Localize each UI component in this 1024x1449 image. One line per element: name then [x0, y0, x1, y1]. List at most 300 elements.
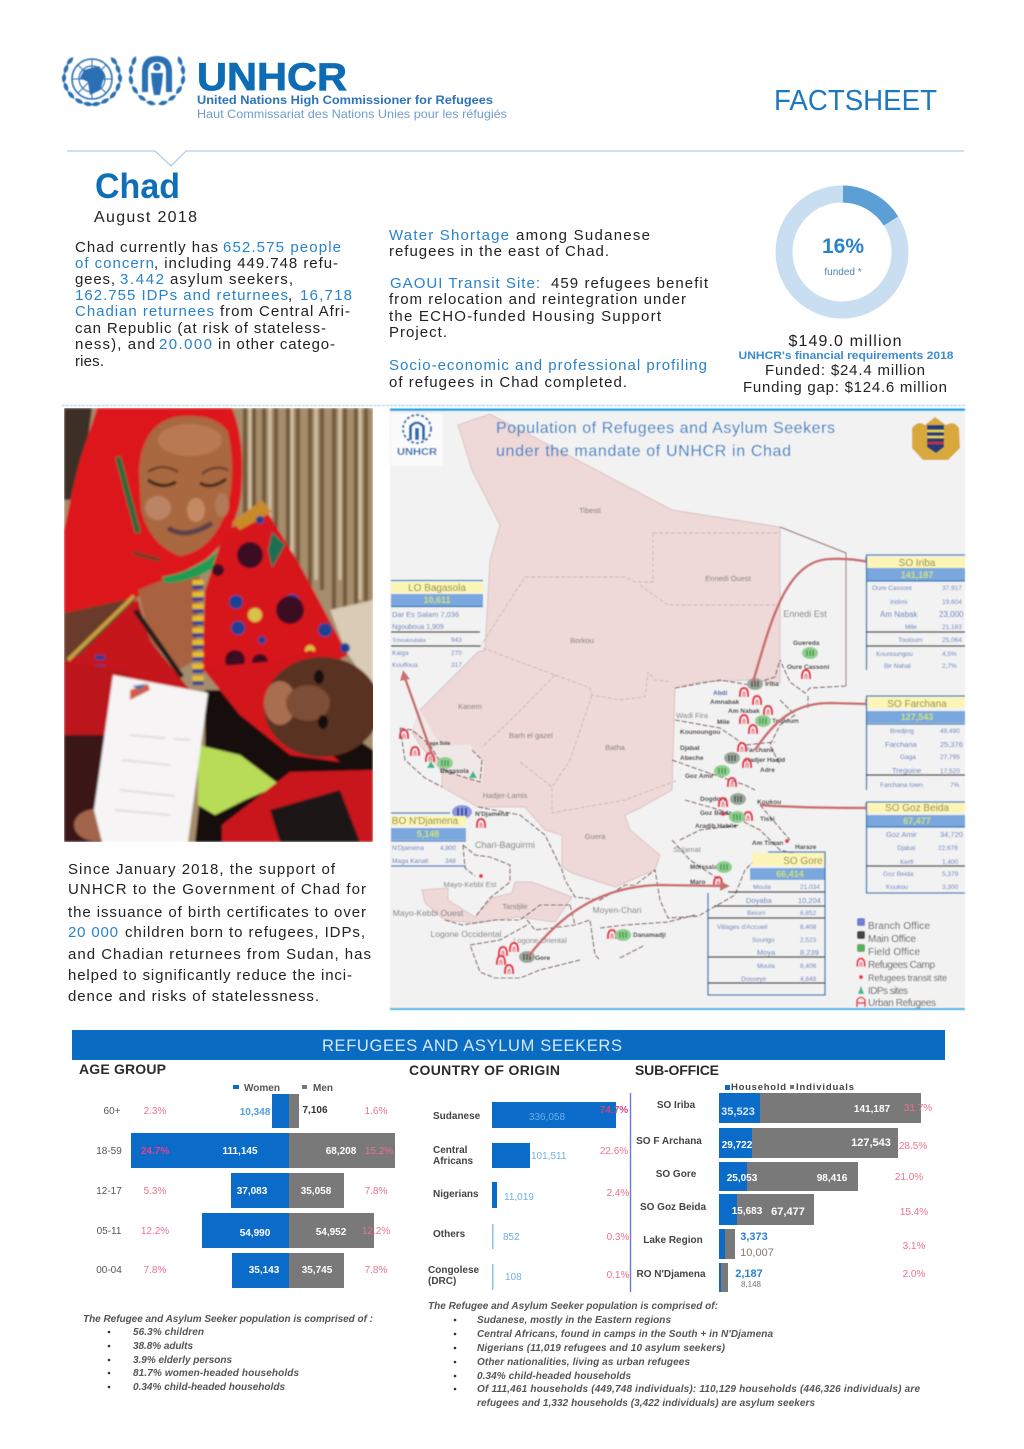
country values [503, 1112, 567, 1283]
table: SO Iriba: Oure Cassoni [872, 585, 912, 592]
values: 10,348 [240, 1107, 271, 1118]
map title: Population of Refugees and Asylum Seekers [496, 420, 835, 437]
text block: population summary: can Republic (at risk of stateless- [75, 320, 326, 337]
office values: 2,187 [735, 1268, 763, 1280]
table: SO Iriba: 19,604 [942, 599, 962, 606]
country percentages: 0.3% [607, 1232, 630, 1243]
country labels: Congolese [428, 1265, 480, 1276]
table: SO Iriba: SO Iriba [899, 558, 936, 569]
map: town labels: Amnabak [710, 699, 740, 706]
baby hood [202, 650, 340, 762]
map: town labels: Danamadji [633, 932, 666, 939]
table: SO Goz Beida: Goz Beida [883, 871, 914, 878]
text block: population summary: 162.755 IDPs and returnees [75, 287, 288, 304]
table: SO Goz Beida: 3,300 [942, 884, 959, 891]
percentages: 7.8% [365, 1186, 388, 1197]
table: SO Gore: 10,204 [798, 896, 821, 905]
legend: household and individuals [725, 1082, 854, 1093]
office values: 29,722 [722, 1140, 753, 1151]
map: town labels: Baga Sola [426, 741, 450, 747]
percentages: 2.3% [144, 1106, 167, 1117]
table: SO Gore: Belom [747, 910, 765, 917]
bars: sub-office [719, 1093, 921, 1292]
bars: country of origin [492, 1102, 616, 1290]
table: SO Gore: 2,523 [800, 937, 817, 944]
text block: highlights: among Sudanese [516, 227, 650, 244]
map: town labels: Oure Cassoni [787, 664, 829, 671]
map: region labels: Mayo-Kebbi Est [444, 880, 497, 889]
office labels: SO Iriba [657, 1100, 696, 1111]
table: SO Gore: 6,406 [800, 963, 817, 970]
table: SO Iriba: 21,183 [942, 624, 962, 631]
text block: population summary: from Central Afri- [220, 303, 350, 320]
heading: factsheet: FACTSHEET [774, 85, 937, 117]
table: SO Farchana: 25,376 [940, 740, 963, 749]
map: field and main office markers [427, 647, 818, 963]
map: region labels: Wadi Fira [676, 711, 709, 720]
office values: 67,477 [771, 1206, 805, 1218]
table: lake region: Ngouboua 1,909 [392, 624, 444, 631]
values: 35,058 [301, 1186, 332, 1197]
title: Chad: Chad [95, 167, 180, 206]
table: SO Farchana: 49,490 [940, 728, 960, 735]
certificate [94, 675, 208, 842]
legend: women and men [233, 1083, 333, 1094]
coat of arms of Chad [912, 417, 960, 460]
map: town labels: Hadjer Hadid [745, 757, 785, 764]
text block: origin notes: Central Africans, found in camps in the South + in N'Djamena [477, 1329, 773, 1340]
funding figures: $149.0 million [788, 333, 902, 350]
text block: age notes: 0.34% child-headed households [133, 1382, 285, 1393]
text block: population summary: , [288, 287, 292, 304]
neck and chest [138, 565, 200, 670]
values: 7,106 [302, 1105, 328, 1116]
bars: age pyramid [131, 1094, 395, 1288]
table: SO Farchana: 17,520 [940, 768, 960, 775]
text block: highlights: from relocation and reintegration under [389, 291, 686, 308]
map legend: Field Office [868, 947, 920, 958]
left sleeve [64, 597, 138, 662]
values: 54,990 [240, 1228, 271, 1239]
text block: age notes: The Refugee and Asylum Seeker population is comprised of : [83, 1314, 373, 1325]
text block: population summary [75, 239, 352, 370]
text block: highlights: of refugees in Chad completed. [389, 374, 627, 391]
country labels: (DRC) [428, 1276, 456, 1287]
table: N'Djamena: 4,800 [440, 845, 457, 852]
map: region labels: Ennedi Ouest [705, 574, 752, 583]
map: town labels: Bagasola [440, 768, 469, 775]
table: SO Iriba: 23,000 [939, 610, 964, 619]
map: town labels: Touloum [772, 718, 799, 725]
country percentages: 2.4% [607, 1188, 630, 1199]
map: pink northern regions [412, 414, 780, 887]
age labels: 00-04 [96, 1265, 122, 1276]
table: lake region [391, 580, 483, 669]
values: 35,143 [249, 1265, 280, 1276]
baby face [264, 657, 380, 757]
map: town labels: Abeche [680, 755, 704, 762]
table: SO Goz Beida: SO Goz Beida [885, 803, 949, 814]
patterned dress [201, 513, 348, 670]
map: town labels: Moissala [690, 864, 718, 871]
table: SO Gore: Villages d'Accueil [717, 924, 768, 931]
table: SO Iriba: Touloum [898, 637, 923, 644]
text block: origin notes: Of 111,461 households (449,748 individuals): 110,129 households (446,326 individuals) are [477, 1384, 920, 1395]
text block: age notes: 38.8% adults [133, 1341, 193, 1352]
logo: UNHCR wordmark: Haut Commissariat des Nations Unies pour les réfugiés [197, 107, 507, 121]
photo: mother and child with birth certificate [64, 408, 380, 842]
values [222, 1105, 357, 1276]
text block: highlights [389, 227, 709, 391]
map legend: Main Office [868, 934, 916, 945]
table: SO Farchana: Bredjing [890, 728, 914, 735]
country percentages: 74.7% [600, 1105, 628, 1116]
photo caption text: helped to significantly reduce the inci- [68, 967, 352, 984]
section banner: refugees and asylum seekers: REFUGEES AND ASYLUM SEEKERS [322, 1037, 622, 1055]
country labels: Central [433, 1145, 468, 1156]
text block: population summary: gees, [75, 271, 115, 288]
text block: age notes [83, 1314, 373, 1393]
values: 37,083 [237, 1186, 268, 1197]
table: SO Gore: Sourigo [752, 937, 775, 944]
country values: 11,019 [504, 1192, 534, 1203]
map: region labels: Logone Oriental [513, 936, 567, 945]
text block: origin notes: The Refugee and Asylum Seeker population is comprised of: [428, 1301, 718, 1312]
table: N'Djamena: 348 [445, 858, 456, 865]
arrow: to SO Goz Beida [760, 805, 868, 808]
percentages: 7.8% [365, 1265, 388, 1276]
map: town labels: Haraze [795, 844, 817, 851]
table: SO Gore: Moula [757, 963, 775, 970]
face [139, 416, 232, 556]
country values: 101,511 [531, 1151, 567, 1162]
office percentages [895, 1103, 932, 1280]
text block: highlights: refugees in the east of Chad. [389, 243, 609, 260]
map: town labels: Goz Amir [685, 773, 714, 780]
country percentages [600, 1105, 630, 1281]
age labels [96, 1106, 122, 1276]
green scarf trim [160, 552, 218, 584]
heading: sub-office: SUB-OFFICE [635, 1062, 719, 1078]
funding figures: UNHCR's financial requirements 2018 [738, 350, 954, 362]
table: SO Farchana [866, 696, 965, 790]
table: SO Iriba: 25,064 [942, 637, 962, 644]
map: town labels: Farchana [745, 747, 774, 754]
table: SO Farchana: SO Farchana [887, 699, 947, 710]
map: region labels [393, 506, 827, 945]
text block: population summary: 652.575 people [223, 239, 341, 256]
office values [721, 1104, 891, 1289]
table: SO Iriba: Am Nabak [880, 610, 918, 619]
funding figures: Funding gap: $124.6 million [743, 379, 947, 396]
table: lake region: 317 [451, 662, 462, 669]
arrow: to SO Iriba [753, 559, 868, 682]
text block: population summary: , including 449.748 refu- [154, 255, 338, 272]
percentages: 5.3% [144, 1186, 167, 1197]
values: 54,952 [316, 1227, 347, 1238]
map: region labels: Borkou [570, 636, 594, 645]
text block: origin notes: Other nationalities, living as urban refugees [477, 1357, 690, 1368]
table: SO Farchana: Treguine [892, 766, 921, 775]
text block: highlights: GAOUI Transit Site: [390, 275, 540, 292]
age labels: 60+ [104, 1106, 121, 1117]
office values: 3,373 [740, 1231, 768, 1243]
photo caption text: the issuance of birth certificates to over [68, 904, 366, 921]
office values: 127,543 [851, 1137, 891, 1149]
map: region labels: Ennedi Est [783, 609, 827, 619]
percentages: 15.2% [365, 1146, 393, 1157]
table: SO Gore: 66,414 [776, 869, 804, 879]
table: N'Djamena [391, 813, 466, 866]
text block: age notes: 56.3% children [133, 1327, 204, 1338]
section banner: refugees and asylum seekers [72, 1030, 945, 1060]
map: region labels: Logone Occidental [431, 929, 502, 939]
logo: UNHCR wordmark: United Nations High Commissioner for Refugees [197, 93, 493, 107]
country labels: Others [433, 1229, 466, 1240]
percentages [141, 1106, 393, 1276]
table: SO Iriba: Bir Nahal [884, 663, 911, 670]
country percentages: 0.1% [607, 1270, 630, 1281]
table: SO Gore: 4,848 [800, 976, 817, 983]
legend: women and men: Men [313, 1083, 333, 1094]
office values: 141,187 [854, 1104, 891, 1115]
map: town labels: Adre [760, 767, 775, 774]
map title: under the mandate of UNHCR in Chad [496, 443, 791, 460]
table: N'Djamena: BO N'Djamena [392, 816, 459, 827]
table: SO Iriba [866, 555, 965, 670]
date: August 2018 [94, 209, 197, 226]
text block: origin notes: refugees and 1,332 households (3,422 individuals) are asylum seekers [477, 1398, 815, 1409]
map: region borders [400, 527, 846, 978]
table: SO Gore: 8,408 [800, 924, 817, 931]
header rule with notch [67, 151, 964, 166]
map: town labels: N'Djamena [475, 811, 509, 818]
map: town labels: Koukou [757, 799, 781, 806]
map logo: UNHCR [391, 414, 443, 466]
age labels: 05-11 [97, 1226, 122, 1237]
percentages: 1.6% [365, 1106, 388, 1117]
table: SO Goz Beida: 34,720 [940, 830, 963, 839]
table: SO Farchana: 7% [950, 782, 960, 789]
table: SO Farchana: Farchana town [880, 782, 923, 789]
table: SO Farchana: 127,543 [901, 712, 933, 722]
text block: population summary: asylum seekers, [170, 271, 293, 288]
funding figures [738, 333, 954, 396]
table: SO Farchana: Farchana [885, 740, 918, 749]
map: region labels: Salamat [673, 845, 702, 854]
table: SO Iriba: Mile [905, 624, 917, 631]
table: SO Gore [708, 852, 825, 995]
map: region labels: Tibesti [579, 506, 601, 515]
map: town labels: Mile [717, 719, 730, 726]
donut chart: funding: funded * [824, 267, 862, 278]
text block: origin notes: 0.34% child-headed households [477, 1371, 631, 1382]
text block: highlights: 459 refugees benefit [551, 275, 709, 292]
text block: population summary: 20.000 [159, 336, 212, 353]
map: town labels: Dogdore [700, 796, 727, 803]
map: region labels: Barh el gazel [509, 731, 553, 740]
table: SO Gore: Dosseye [741, 976, 767, 983]
map: region labels: Chari-Baguirmi [475, 840, 535, 850]
text block: population summary: 16,718 [300, 287, 352, 304]
office labels [636, 1100, 706, 1280]
map: pink southern regions [422, 882, 572, 923]
arrow: to SO Gore [528, 885, 722, 957]
table: SO Farchana: Gaga [900, 754, 916, 761]
heading: age group: AGE GROUP [79, 1061, 166, 1077]
table: N'Djamena: N'Djamena [392, 845, 424, 852]
office values: 15,683 [732, 1206, 763, 1217]
country labels: Africans [433, 1156, 473, 1167]
table: SO Farchana: 27,795 [940, 754, 960, 761]
country labels: Sudanese [433, 1111, 481, 1122]
hand [72, 808, 102, 842]
map: town labels: Djabal [680, 745, 700, 752]
office percentages: 21.0% [895, 1172, 923, 1183]
text block: population summary: 3.442 [120, 271, 164, 288]
legend: household and individuals: Household [731, 1082, 786, 1093]
office percentages: 28.5% [899, 1141, 927, 1152]
table: SO Iriba: Iridimi [890, 599, 907, 606]
text block: origin notes: Nigerians (11,019 refugees and 10 asylum seekers) [477, 1343, 726, 1354]
divider between charts [630, 1093, 632, 1292]
photo caption text [68, 861, 371, 1005]
table: SO Iriba: 2,7% [942, 663, 957, 670]
logo: UNHCR wordmark: UNHCR [197, 56, 347, 99]
text block: origin notes [428, 1301, 920, 1409]
panel: country of origin chart [409, 1062, 630, 1290]
map: town labels: Gore [535, 955, 551, 962]
text block: highlights: Socio-economic and professional profiling [389, 357, 707, 374]
table: SO Iriba: Kounoungou [876, 651, 913, 658]
photo caption text: and Chadian returnees from Sudan, has [68, 946, 371, 963]
table: N'Djamena: 5,148 [417, 829, 439, 839]
photo caption text: children born to refugees, IDPs, [125, 924, 365, 941]
table: SO Goz Beida [866, 802, 965, 893]
map legend [857, 918, 947, 1009]
table: SO Goz Beida: Koukou [886, 884, 908, 891]
map: region labels: Hadjer-Lamis [483, 791, 528, 800]
country values: 108 [505, 1272, 522, 1283]
map: town labels: Aradib Habile [695, 823, 737, 830]
table: lake region: Dar Es Salam 7,036 [392, 610, 459, 619]
age labels: 18-59 [96, 1146, 122, 1157]
logo: UNHCR wordmark [197, 56, 507, 121]
map: town labels [426, 640, 829, 962]
text block: highlights: Project. [389, 324, 447, 341]
map: region labels: Mayo-Kebbi Ouest [393, 908, 464, 918]
table: SO Goz Beida: 22,678 [938, 845, 958, 852]
table: SO Iriba: 4,5% [942, 651, 957, 658]
photo caption text: UNHCR to the Government of Chad for [68, 881, 366, 898]
percentages: 12.2% [362, 1226, 390, 1237]
logo: UN emblem [61, 56, 123, 107]
map: town labels: Maro [690, 879, 706, 886]
table: SO Goz Beida: Goz Amir [886, 830, 917, 839]
text block: population summary: ness), and [75, 336, 155, 353]
map: region labels: Kanem [458, 702, 482, 711]
map: region labels: Tandjile [502, 902, 528, 911]
map: region labels: Batha [605, 743, 626, 752]
map: town labels: Kounoungou [680, 729, 720, 736]
heading: country of origin: COUNTRY OF ORIGIN [409, 1062, 560, 1078]
map legend: Refugees transit site [868, 973, 947, 983]
office percentages: 2.0% [903, 1269, 926, 1280]
text block: age notes: 3.9% elderly persons [133, 1355, 232, 1366]
text block: highlights: Water Shortage [389, 227, 509, 244]
map legend: IDPs sites [868, 986, 908, 997]
country values: 336,058 [529, 1112, 566, 1123]
office percentages: 15.4% [900, 1207, 928, 1218]
table: SO Gore: SO Gore [783, 856, 823, 867]
text block: population summary: Chad currently has [75, 239, 218, 256]
table: lake region: 10,611 [423, 595, 451, 605]
map: town labels: Goz Beida [700, 810, 732, 817]
map: town labels: Abdi [713, 690, 728, 697]
age labels: 12-17 [96, 1186, 122, 1197]
percentages: 12.2% [141, 1226, 169, 1237]
values: 111,145 [222, 1146, 258, 1157]
text block: population summary: of concern [75, 255, 154, 272]
office labels: SO Goz Beida [640, 1202, 706, 1213]
table: SO Gore: Doyaba [746, 896, 773, 905]
office labels: SO Gore [656, 1169, 697, 1180]
table: SO Gore: 8,852 [800, 910, 817, 917]
legend: household and individuals: Individuals [796, 1082, 854, 1093]
map: region labels: Moyen-Chari [593, 905, 641, 915]
office values: 35,523 [721, 1106, 755, 1118]
legend: women and men: Women [244, 1083, 280, 1094]
panel: age group chart [79, 1061, 395, 1288]
map: town labels: Am Timan [752, 840, 783, 847]
percentages: 7.8% [144, 1265, 167, 1276]
office percentages: 3.1% [903, 1241, 926, 1252]
table: SO Iriba: 37,917 [942, 585, 962, 592]
text block: population summary: Chadian returnees [75, 303, 214, 320]
baby clothes [195, 690, 373, 842]
photo caption text: Since January 2018, the support of [68, 861, 336, 878]
table: SO Gore: 21,034 [800, 884, 820, 891]
text block: age notes: 81.7% women-headed households [133, 1368, 299, 1379]
bead necklace [192, 580, 204, 686]
map logo: UNHCR: UNHCR [397, 447, 438, 458]
table: SO Goz Beida: 5,379 [942, 871, 959, 878]
office labels: SO F Archana [636, 1136, 702, 1147]
scarf [64, 408, 242, 615]
map legend: Urban Refugees [868, 998, 936, 1009]
photo caption text: dence and risks of statelessness. [68, 988, 319, 1005]
table: SO Gore: 8,239 [800, 948, 819, 957]
office values: 98,416 [817, 1173, 848, 1184]
table: SO Iriba: 141,187 [901, 570, 933, 580]
percentages: 24.7% [141, 1146, 169, 1157]
country labels [428, 1111, 481, 1287]
map: town labels: Am Nabak [728, 708, 760, 715]
map title [496, 420, 835, 460]
table: lake region: 270 [451, 650, 462, 657]
text block: population summary: in other catego- [218, 336, 335, 353]
arrow: to SO Farchana [755, 703, 868, 750]
map legend: Refugees Camp [868, 960, 935, 971]
country labels: Nigerians [433, 1189, 479, 1200]
map: town labels: Tissi [760, 816, 775, 823]
map: region labels: Guera [585, 832, 606, 841]
table: lake region: 943 [451, 637, 462, 644]
map legend: Branch Office [868, 921, 930, 932]
table: lake region: Tchoukoutalia [392, 638, 427, 644]
office percentages: 31.7% [904, 1103, 932, 1114]
table: lake region: Koulfoua [392, 662, 418, 669]
